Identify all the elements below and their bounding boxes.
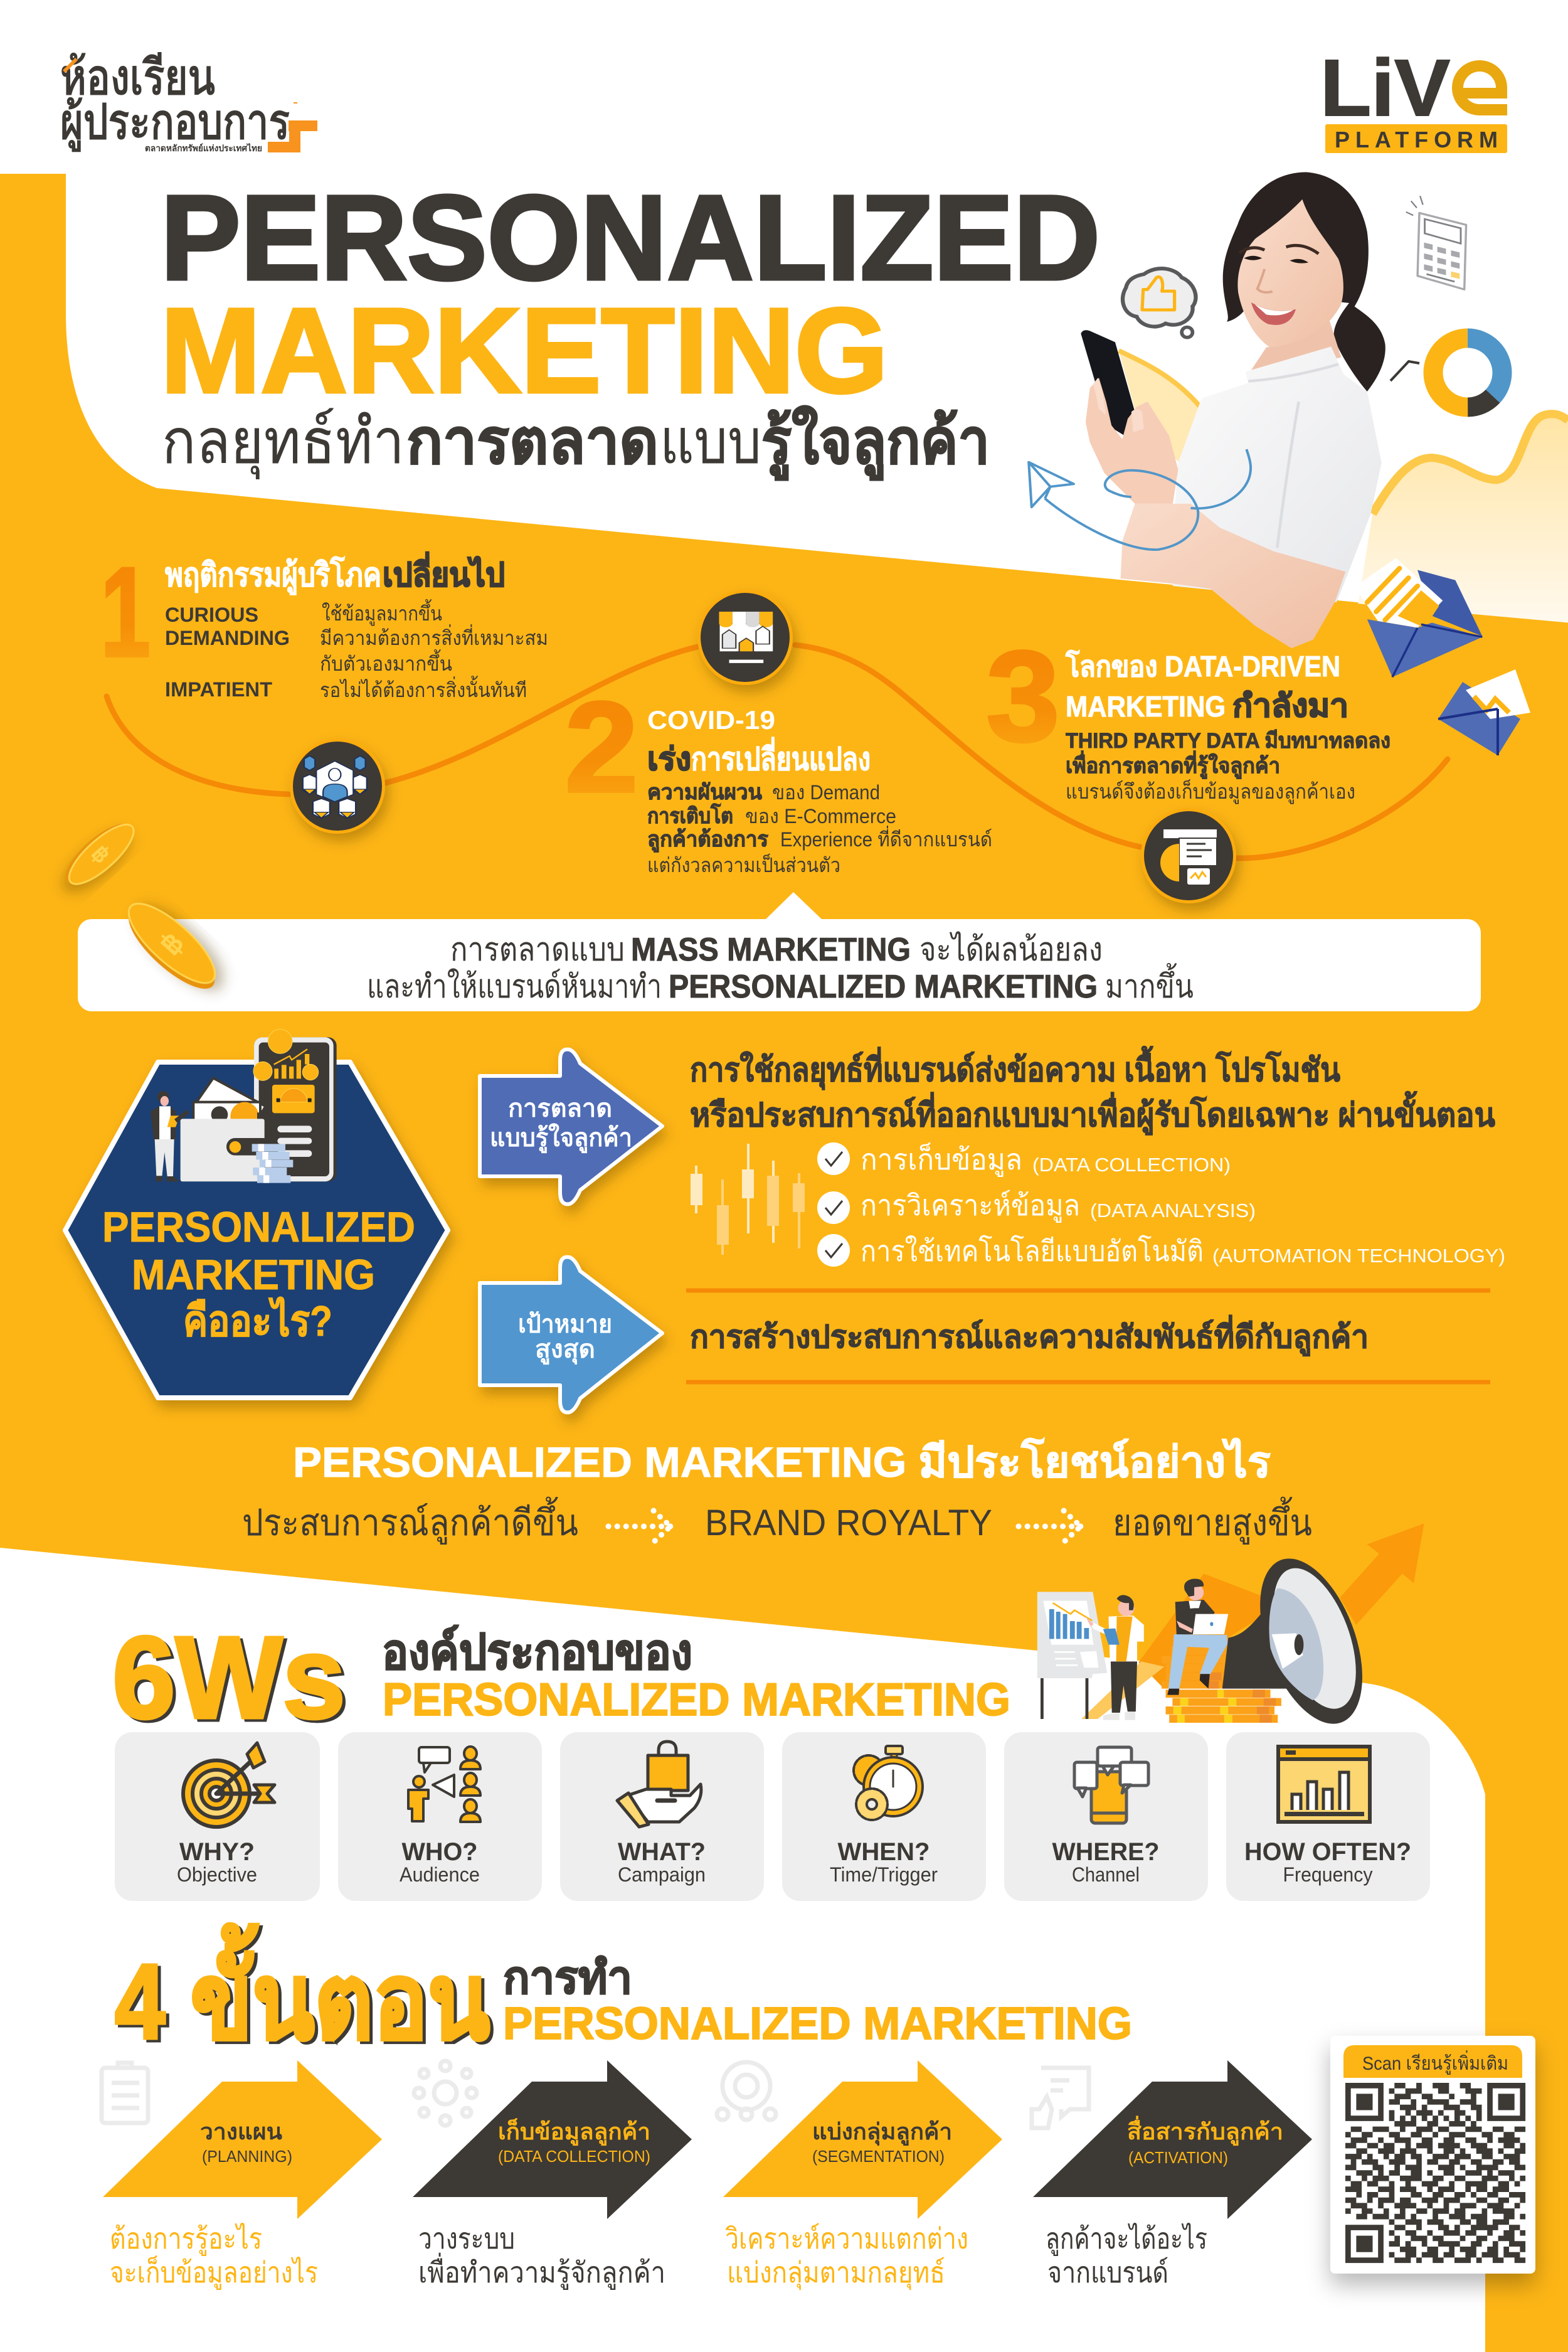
ghost icon: clipboard xyxy=(102,2063,148,2123)
text: segmentation detail: แบ่งกลุ่มตามกลยุทธ์ xyxy=(727,2256,945,2291)
title: MARKETING xyxy=(161,283,888,418)
section 2: covid-19: ของ Demand xyxy=(772,781,880,804)
benefit flow xyxy=(242,1497,1312,1545)
panel: hexagon what is personalized marketing: MARKETING xyxy=(132,1251,375,1299)
icon: envelope large xyxy=(1355,558,1482,677)
step arrow: segmentation xyxy=(723,2060,1002,2219)
heading: 6Ws: 6Ws xyxy=(112,1613,346,1743)
step: data analysis xyxy=(817,1189,1256,1224)
card: what: Campaign xyxy=(618,1863,706,1886)
step arrow: data collection xyxy=(413,2060,692,2219)
step: data collection xyxy=(817,1142,1231,1177)
megaphone xyxy=(1222,1551,1381,1732)
logo: Live Platform: LiV xyxy=(1320,43,1450,133)
card: where: Channel xyxy=(1072,1863,1140,1886)
step arrow: planning: วางแผน xyxy=(200,2119,282,2144)
icon: thumbs up thought bubble xyxy=(1123,269,1195,338)
section 1: behaviour changes: รอไม่ได้ต้องการสิ่งนั้นทันที xyxy=(320,676,527,701)
panel: QR code: Scan เรียนรู้เพิ่มเติม xyxy=(1362,2050,1508,2075)
section 2: covid-19: ลูกค้าต้องการ xyxy=(647,827,769,853)
card: what: WHAT? xyxy=(618,1838,706,1866)
section 1: behaviour changes: กับตัวเองมากขึ้น xyxy=(320,649,452,675)
section 3: data-driven: แบรนด์จึงต้องเก็บข้อมูลของลูกค้าเอง xyxy=(1066,779,1355,804)
section 3: data-driven: THIRD PARTY DATA มีบทบาทลดลง xyxy=(1066,729,1391,753)
text: definition: การใช้กลยุทธ์ที่แบรนด์ส่งข้อความ เนื้อหา โปรโมชัน xyxy=(690,1046,1340,1090)
section 1: behaviour changes: เปลี่ยนไป xyxy=(383,552,505,593)
section 2: covid-19: การเติบโต xyxy=(647,803,733,828)
step: data collection: (DATA COLLECTION) xyxy=(1032,1154,1231,1176)
step arrow: data collection: (DATA COLLECTION) xyxy=(498,2147,650,2166)
heading: 4 steps xyxy=(115,1924,1132,2064)
section 2: covid-19: COVID-19 xyxy=(647,705,775,735)
step: automation technology: (AUTOMATION TECHNOLOGY) xyxy=(1212,1245,1505,1267)
callout: mass to personalized: การตลาดแบบ xyxy=(450,932,625,968)
card: what xyxy=(560,1732,764,1901)
section 2: covid-19: Experience ที่ดีจากแบรนด์ xyxy=(780,826,992,851)
arrow: ultimate goal xyxy=(480,1257,662,1412)
icon: people network badge xyxy=(290,738,385,834)
section 1: behaviour changes: IMPATIENT xyxy=(165,678,272,701)
step arrow: segmentation: แบ่งกลุ่มลูกค้า xyxy=(812,2119,952,2146)
section 1: behaviour changes: มีความต้องการสิ่งที่เหมาะสม xyxy=(320,624,548,649)
card: who xyxy=(338,1732,542,1901)
card: where xyxy=(1004,1732,1208,1901)
card: where: WHERE? xyxy=(1052,1838,1159,1866)
step arrow: activation: สื่อสารกับลูกค้า xyxy=(1127,2115,1283,2146)
step arrow: planning: (PLANNING) xyxy=(202,2147,292,2166)
QR matrix xyxy=(1345,2083,1525,2263)
section 2: covid-19: การเปลี่ยนแปลง xyxy=(691,737,871,777)
callout: mass to personalized: มากขึ้น xyxy=(1105,963,1194,1005)
card: how often: Frequency xyxy=(1283,1863,1372,1886)
numeral 2: 2 xyxy=(564,675,638,819)
numeral 3: 3 xyxy=(986,624,1060,769)
chart: donut xyxy=(1391,338,1502,407)
logo: classroom: ผู้ประกอบการ xyxy=(60,94,290,151)
callout: mass to personalized: PERSONALIZED MARKETING xyxy=(669,969,1098,1005)
step arrow: activation: (ACTIVATION) xyxy=(1128,2148,1228,2167)
heading: 4 steps: 4 ขั้นตอน xyxy=(115,1924,490,2062)
section 2: covid-19: ของ E-Commerce xyxy=(745,805,896,827)
card: why: WHY? xyxy=(179,1838,255,1866)
step: automation technology xyxy=(817,1234,1505,1267)
arrow: ultimate goal: เป้าหมาย xyxy=(518,1311,612,1338)
card: when: WHEN? xyxy=(838,1838,930,1866)
card: when xyxy=(782,1732,986,1901)
text: planning detail: ต้องการรู้อะไร xyxy=(110,2222,262,2256)
section 3: data-driven: เพื่อการตลาดที่รู้ใจลูกค้า xyxy=(1066,750,1280,779)
benefit flow: ประสบการณ์ลูกค้าดีขึ้น xyxy=(242,1497,578,1545)
step: data collection: การเก็บข้อมูล xyxy=(861,1142,1022,1177)
text: definition xyxy=(690,1046,1495,1136)
list: three steps xyxy=(817,1142,1505,1267)
step: data analysis: (DATA ANALYSIS) xyxy=(1090,1200,1256,1221)
logo: classroom: ห้องเรียน xyxy=(60,50,215,105)
heading: 6Ws: PERSONALIZED MARKETING xyxy=(383,1674,1010,1725)
title: แบบ xyxy=(660,407,761,477)
title xyxy=(161,170,1100,481)
illustration: team megaphone and growth arrow xyxy=(1037,1523,1424,1732)
card: how often: HOW OFTEN? xyxy=(1244,1838,1411,1866)
presenter xyxy=(1086,1595,1144,1720)
heading: 6Ws xyxy=(112,1613,1010,1745)
section 1: behaviour changes xyxy=(100,541,548,701)
seated man with laptop xyxy=(1167,1578,1228,1695)
logo: classroom: ตลาดหลักทรัพย์แห่งประเทศไทย xyxy=(145,142,262,153)
icon: coin small: ฿ xyxy=(87,840,115,868)
step: automation technology: การใช้เทคโนโลยีแบบอัตโนมัติ xyxy=(861,1235,1204,1267)
logo: classroom xyxy=(60,50,317,153)
callout: mass to personalized: และทำให้แบรนด์หันมาทำ xyxy=(367,968,662,1005)
section 2: covid-19: เร่ง xyxy=(647,742,691,777)
icon: online shop badge xyxy=(697,590,793,685)
panel: hexagon what is personalized marketing xyxy=(65,1030,448,1398)
numeral 1: 1 xyxy=(100,541,151,684)
chart: decorative candlesticks xyxy=(691,1144,805,1255)
icon: coin large xyxy=(115,892,229,1001)
icon: data dashboard badge xyxy=(1141,808,1236,903)
icon: stopwatch and gears xyxy=(854,1746,923,1820)
step arrow: data collection: เก็บข้อมูลลูกค้า xyxy=(498,2117,650,2146)
step arrow: planning xyxy=(103,2060,382,2219)
section 3: data-driven: MARKETING xyxy=(1066,690,1226,723)
ghost icon: chat and hand xyxy=(1032,2068,1089,2128)
card: how often xyxy=(1226,1732,1430,1901)
step arrow: segmentation: (SEGMENTATION) xyxy=(812,2147,945,2166)
callout: mass to personalized: MASS MARKETING xyxy=(631,932,911,968)
card: why: Objective xyxy=(177,1863,257,1886)
step: data analysis: การวิเคราะห์ข้อมูล xyxy=(861,1189,1080,1223)
icon: window with bar chart xyxy=(1278,1747,1370,1822)
icon: coin small xyxy=(57,814,142,895)
arrow: ultimate goal: สูงสุด xyxy=(535,1336,595,1365)
logo: Live Platform xyxy=(1320,43,1507,153)
panel: hexagon what is personalized marketing: PERSONALIZED xyxy=(102,1203,415,1251)
section 2: covid-19: ความผันผวน xyxy=(647,780,762,804)
icon: phone and chat bubbles xyxy=(1074,1747,1148,1823)
icon: coin large: ฿ xyxy=(154,926,190,961)
text: planning detail xyxy=(110,2222,318,2290)
arrow: dotted xyxy=(608,1511,670,1542)
section 3: data-driven: โลกของ DATA-DRIVEN xyxy=(1065,649,1340,683)
heading: 6Ws: องค์ประกอบของ xyxy=(382,1624,692,1679)
text: activation detail: ลูกค้าจะได้อะไร xyxy=(1046,2222,1207,2256)
section 1: behaviour changes: CURIOUS xyxy=(165,604,258,626)
card: who: WHO? xyxy=(401,1838,478,1866)
callout: mass to personalized: จะได้ผลน้อยลง xyxy=(919,931,1103,968)
icon: hand holding bag xyxy=(617,1742,701,1827)
section 1: behaviour changes: DEMANDING xyxy=(165,627,290,649)
title: การตลาด xyxy=(406,407,659,477)
title: PERSONALIZED xyxy=(161,170,1100,305)
text: collection detail: เพื่อทำความรู้จักลูกค้า xyxy=(418,2252,665,2290)
section 1: behaviour changes: พฤติกรรมผู้บริโภค xyxy=(165,555,381,595)
ghost icon: network xyxy=(414,2061,477,2126)
title: กลยุทธ์ทำ xyxy=(162,407,405,480)
card: who: Audience xyxy=(400,1863,480,1886)
heading: 6Ws: 6Ws xyxy=(115,1615,349,1745)
arrow: personalized marketing meaning: การตลาด xyxy=(508,1095,612,1122)
text: collection detail: วางระบบ xyxy=(418,2222,515,2255)
heading: benefits: PERSONALIZED MARKETING มีประโยชน์อย่างไร xyxy=(293,1437,1271,1486)
arrow: dotted xyxy=(1019,1511,1081,1542)
text: definition: หรือประสบการณ์ที่ออกแบบมาเพื่อผู้รับโดยเฉพาะ ผ่านขั้นตอน xyxy=(690,1091,1495,1136)
title: รู้ใจลูกค้า xyxy=(761,405,990,481)
heading: 4 steps: 4 ขั้นตอน xyxy=(118,1926,493,2064)
benefit flow: ยอดขายสูงขึ้น xyxy=(1113,1497,1312,1545)
heading: 4 steps: PERSONALIZED MARKETING xyxy=(503,1999,1132,2049)
text: activation detail xyxy=(1046,2222,1207,2289)
panel: hexagon what is personalized marketing: คืออะไร? xyxy=(183,1296,332,1345)
presentation board xyxy=(1037,1592,1107,1719)
ghost icon: target and people xyxy=(717,2062,776,2120)
section 2: covid-19 xyxy=(564,675,992,876)
text: goal statement: การสร้างประสบการณ์และความสัมพันธ์ที่ดีกับลูกค้า xyxy=(690,1315,1369,1356)
icon: speaker and audience xyxy=(408,1747,480,1822)
text: segmentation detail xyxy=(725,2222,968,2291)
hero illustration: woman with phone xyxy=(1081,172,1568,648)
callout: mass to personalized xyxy=(78,892,1481,1011)
benefit flow: BRAND ROYALTY xyxy=(705,1503,992,1543)
arrow: personalized marketing meaning: แบบรู้ใจลูกค้า xyxy=(490,1123,632,1153)
wave timeline xyxy=(107,645,1448,858)
panel: QR code xyxy=(1330,2036,1535,2274)
text: activation detail: จากแบรนด์ xyxy=(1047,2256,1168,2289)
text: planning detail: จะเก็บข้อมูลอย่างไร xyxy=(110,2255,318,2290)
step arrow: activation xyxy=(1033,2060,1312,2219)
heading: 4 steps: การทำ xyxy=(503,1953,632,2003)
icon: target xyxy=(183,1743,275,1827)
text: segmentation detail: วิเคราะห์ความแตกต่าง xyxy=(725,2222,968,2255)
arrow: personalized marketing meaning xyxy=(480,1050,662,1204)
text: collection detail xyxy=(418,2222,665,2290)
card: when: Time/Trigger xyxy=(830,1863,938,1886)
section 3: data-driven: กำลังมา xyxy=(1232,688,1348,723)
section 2: covid-19: แต่กังวลความเป็นส่วนตัว xyxy=(647,853,840,876)
section 3: data-driven xyxy=(986,624,1391,804)
coin stack xyxy=(1162,1647,1281,1723)
icon: calculator xyxy=(1406,196,1466,289)
illustration: phone wallet and investor xyxy=(151,1030,337,1183)
section 1: behaviour changes: ใช้ข้อมูลมากขึ้น xyxy=(322,599,442,626)
logo: Live Platform: PLATFORM xyxy=(1335,127,1498,152)
icon: paper plane with blue swoosh xyxy=(1029,449,1251,550)
card: why xyxy=(115,1732,320,1901)
icon: envelope small xyxy=(1438,669,1530,755)
